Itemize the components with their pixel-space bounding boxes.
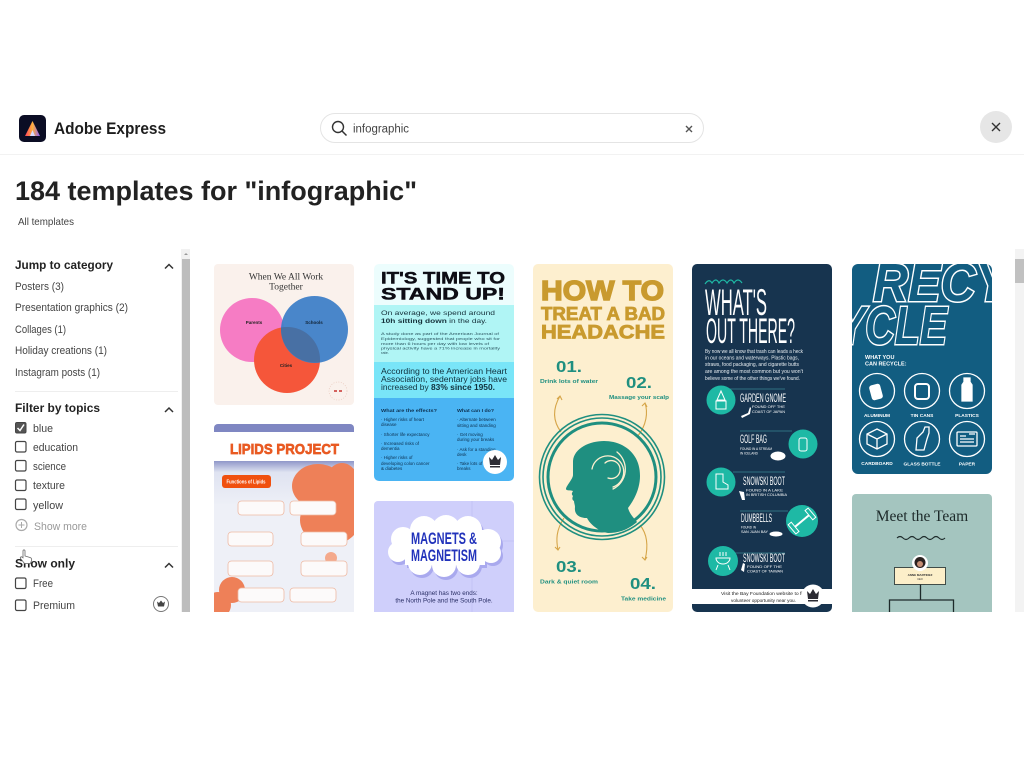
close button <box>980 111 1012 143</box>
functions tag <box>222 475 271 488</box>
arrows <box>554 396 647 560</box>
stand up heading: IT'S TIME TO <box>381 268 505 288</box>
section: show only <box>15 556 173 612</box>
header bar <box>0 111 1024 155</box>
intro paragraph: in our oceans and waterways. Plastic bags, <box>705 356 799 362</box>
sitting statistic: 10h sitting down in the day. <box>381 318 487 325</box>
headache heading <box>540 280 665 339</box>
effects column: · Increased risks of <box>381 441 420 446</box>
org chart <box>890 555 954 612</box>
recycling labels: TIN CANS <box>911 413 934 419</box>
ocean heading <box>705 288 794 344</box>
footer band <box>692 589 832 604</box>
sidebar filters <box>15 258 178 612</box>
section: filter by topics: Show more <box>34 521 87 533</box>
study paragraph <box>381 332 500 354</box>
icon: premium crown badge <box>802 584 822 608</box>
headache heading: HEADACHE <box>541 322 665 344</box>
step labels: Take medicine <box>621 596 666 602</box>
actions column: · Take lots of <box>457 461 483 466</box>
lipids title: LIPIDS PROJECT <box>230 441 339 458</box>
heart association statistic <box>381 367 508 392</box>
section: jump to category: Holiday creations (1) <box>15 345 107 357</box>
recycling labels: PLASTICS <box>955 413 980 419</box>
functions tag: Functions of Lipids <box>226 480 266 486</box>
actions column: desk <box>457 452 467 457</box>
wave ornament <box>897 536 945 540</box>
study paragraph: rate. <box>381 350 389 355</box>
footer band: Visit the Bay Foundation website to find <box>721 591 809 596</box>
item: golf bag: FOUND IN A STREAM <box>740 447 772 451</box>
sidebar scrollbar <box>181 249 190 612</box>
actions column: breaks <box>457 466 471 471</box>
actions column: · Get moving <box>457 432 483 437</box>
item: second snowski boot: FOUND OFF THE <box>747 565 783 569</box>
ocean heading: WHAT'S <box>705 282 767 323</box>
team heading: Meet the Team <box>876 508 968 525</box>
section: jump to category <box>15 258 173 379</box>
venn heading <box>249 272 323 292</box>
icon: hand cursor <box>20 550 32 564</box>
template card: what's out there: OUT THERE? <box>706 312 795 351</box>
template card: meet the team <box>852 494 992 612</box>
page scrollbar <box>1015 249 1024 612</box>
step labels: 03. <box>556 559 582 576</box>
item: garden gnome <box>706 386 786 418</box>
magnets description: A magnet has two ends: <box>410 590 478 597</box>
org chart: ANNE MARTINEZ <box>908 573 933 577</box>
venn heading: Together <box>269 282 304 292</box>
template card: what's out there <box>692 264 832 612</box>
section: show only: Premium <box>33 600 75 612</box>
item: golf bag: IN ICELAND <box>740 452 758 456</box>
effects column: disease <box>381 422 397 427</box>
outlined recycle lettering: RECY <box>873 253 1012 313</box>
wave ornament <box>705 280 742 284</box>
item: second snowski boot: COAST OF TAIWAN <box>747 570 783 574</box>
actions column: sitting and standing <box>457 423 496 428</box>
section: show only: Free <box>33 578 53 590</box>
recycling labels: ALUMINUM <box>864 413 890 419</box>
heart association statistic: According to the American Heart <box>381 367 508 376</box>
item: dumbbells: FOUND IN <box>741 526 756 530</box>
effects column: · Higher risks of <box>381 455 413 460</box>
study paragraph: more than 6 hours per day with low levels of <box>381 341 490 346</box>
intro paragraph: By now we all know that trash can leads a heck <box>705 349 803 355</box>
effects column: · Shorter life expectancy <box>381 432 430 437</box>
venn circles: Cities <box>280 363 293 368</box>
section: jump to category: Collages (1) <box>15 324 66 336</box>
heart association statistic: increased by 83% since 1950. <box>381 383 495 392</box>
section: jump to category: Instagram posts (1) <box>15 367 100 379</box>
search box <box>320 114 704 142</box>
actions column: What can I do? <box>457 408 494 413</box>
headache heading: HOW TO <box>541 275 664 306</box>
template card: what's out there: SNOWSKI BOOT <box>743 553 785 565</box>
page title: 184 templates for "infographic" <box>15 176 417 206</box>
template card: treat a bad headache <box>533 264 673 612</box>
template card: what's out there: SNOWSKI BOOT <box>743 476 785 488</box>
breadcrumb: All templates <box>18 216 74 228</box>
outlined recycle lettering: YCLE <box>838 296 948 356</box>
step labels: Massage your scalp <box>609 395 670 401</box>
effects column: dementia <box>381 446 400 451</box>
magnets description <box>396 590 492 602</box>
search box: infographic <box>353 124 409 136</box>
section: filter by topics: texture <box>33 480 65 492</box>
actions column: during your breaks <box>457 437 495 442</box>
effects column: & diabetes <box>381 466 403 471</box>
actions column <box>457 408 496 471</box>
intro paragraph <box>705 349 804 382</box>
recycle subheading: WHAT YOU <box>865 355 894 361</box>
venn circles: Parents <box>246 320 263 325</box>
brand name: Adobe Express <box>54 119 166 138</box>
magnets title: MAGNETS & <box>411 530 477 548</box>
icon: Adobe Express logo <box>19 115 46 142</box>
study paragraph: A study done as part of the American Journal of <box>381 331 500 336</box>
small emblem <box>329 382 347 400</box>
recycling icons <box>860 374 984 456</box>
step labels: 04. <box>630 576 656 593</box>
intro paragraph: straws, food packaging, and cigarette butts <box>705 362 799 368</box>
item: snowski boot: FOUND IN A LAKE <box>746 488 784 492</box>
effects column: · Higher risks of heart <box>381 417 425 422</box>
magnets title <box>412 532 477 561</box>
section: filter by topics <box>15 401 173 533</box>
item: garden gnome: FOUND OFF THE <box>752 405 785 409</box>
icon: premium crown badge <box>483 450 507 474</box>
stand up heading: STAND UP! <box>381 284 505 304</box>
template card: lipids project <box>214 424 354 612</box>
section: jump to category: Presentation graphics (2) <box>15 302 128 314</box>
template card: magnets and magnetism <box>374 501 514 612</box>
template card: time to stand up <box>374 264 514 481</box>
effects column <box>381 408 437 471</box>
venn heading: When We All Work <box>249 272 323 282</box>
recycling labels <box>861 413 980 468</box>
study paragraph: Epidemiology, suggested that people who sit for <box>381 336 501 341</box>
section: filter by topics: education <box>33 442 78 454</box>
item: dumbbells: DUMBBELLS <box>741 513 772 525</box>
screenshot page <box>0 111 1024 612</box>
template card: venn diagram <box>214 264 354 405</box>
step labels: 02. <box>626 375 652 392</box>
recycle subheading <box>865 355 907 368</box>
step labels: Dark & quiet room <box>540 580 598 586</box>
step labels: 01. <box>556 359 582 376</box>
section: filter by topics: blue <box>33 423 53 435</box>
org chart: CEO <box>917 577 923 581</box>
item: dumbbells <box>740 505 818 537</box>
headache heading: TREAT A BAD <box>541 304 665 324</box>
item: golf bag: GOLF BAG <box>740 434 767 446</box>
recycling labels: GLASS BOTTLE <box>903 462 941 468</box>
item: dumbbells: SAN JUAN BAY <box>741 530 768 534</box>
stand up heading <box>381 272 504 300</box>
outlined recycle lettering <box>852 264 992 346</box>
actions column: · Alternate between <box>457 417 496 422</box>
effects column: What are the effects? <box>381 408 437 413</box>
section: jump to category: Posters (3) <box>15 281 64 293</box>
intro paragraph: are among the most common but you won't <box>705 369 804 375</box>
effects column: developing colon cancer <box>381 461 430 466</box>
actions column: · Ask for a standing <box>457 447 496 452</box>
cloud shape <box>388 515 503 580</box>
item: golf bag <box>740 430 818 460</box>
intro paragraph: believe some of the other things we've found. <box>705 376 800 382</box>
section: filter by topics: Filter by topics <box>15 401 100 415</box>
section: show only: Show only <box>15 556 75 570</box>
magnets title: MAGNETISM <box>411 547 477 565</box>
item: garden gnome: COAST OF JAPAN <box>752 410 785 414</box>
template card: recycle <box>852 264 992 474</box>
head and rings diagram <box>540 414 664 540</box>
footer band: volunteer opportunity near you. <box>731 598 796 603</box>
empty label boxes <box>228 501 347 602</box>
magnets description: the North Pole and the South Pole. <box>395 598 493 604</box>
section: filter by topics: science <box>33 461 66 473</box>
sitting statistic: On average, we spend around <box>381 310 495 317</box>
step labels: Drink lots of water <box>540 379 599 385</box>
sitting statistic <box>381 310 495 325</box>
section: filter by topics: yellow <box>33 500 63 512</box>
recycling labels: CARDBOARD <box>861 461 893 467</box>
orange blobs <box>214 463 354 612</box>
item: second snowski boot <box>708 546 785 576</box>
step labels <box>540 359 670 602</box>
section: jump to category: Jump to category <box>15 258 113 272</box>
template card: what's out there: GARDEN GNOME <box>740 391 786 405</box>
venn circles <box>220 296 348 393</box>
recycling labels: PAPER <box>959 462 976 468</box>
item: snowski boot: IN BRITISH COLUMBIA <box>746 493 787 497</box>
heart association statistic: Association, sedentary jobs have <box>381 375 507 384</box>
study paragraph: physical activity have a 71% increase in mortality <box>381 346 500 350</box>
recycle subheading: CAN RECYCLE: <box>865 362 907 368</box>
item: snowski boot <box>706 468 787 500</box>
venn circles: Schools <box>305 320 323 325</box>
